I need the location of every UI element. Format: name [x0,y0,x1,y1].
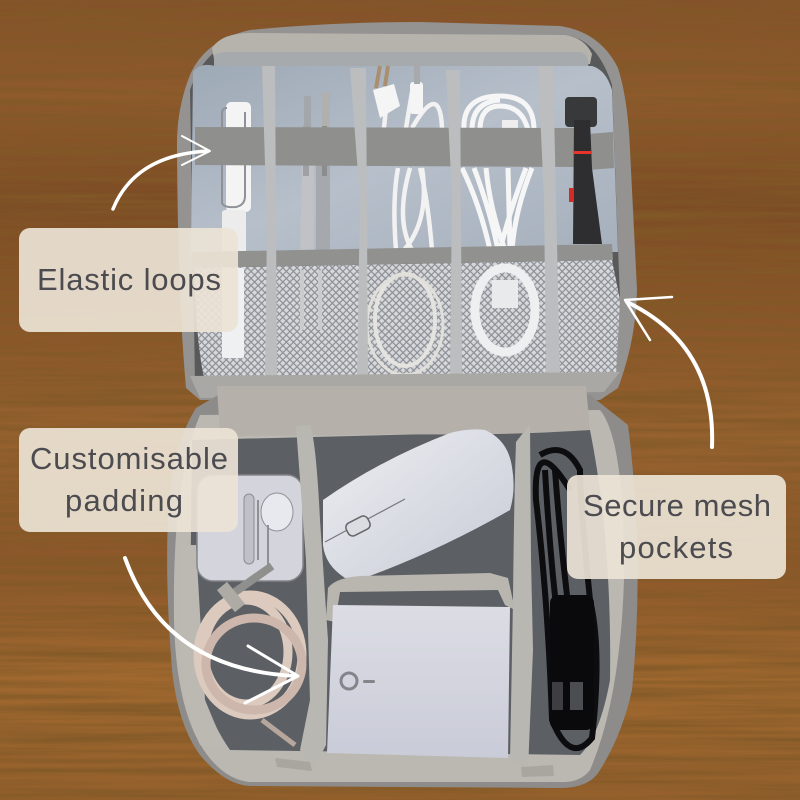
small divider above power bank [326,573,515,622]
arrow to mesh pockets [625,297,712,447]
black torch [565,97,597,127]
lower compartment shell [167,395,638,788]
arrow to elastic loops [113,136,210,209]
callout: elastic loops [19,228,238,332]
upper lid of bag [177,22,637,400]
callout: secure mesh pockets: Secure mesh [583,488,771,523]
callout: elastic loops: Elastic loops [37,262,221,297]
open organiser bag [167,22,638,788]
torch lower body [569,120,602,244]
callout: secure mesh pockets [567,475,786,579]
divider tab bottom right [521,765,554,777]
left divider [296,425,328,770]
arrow to padding [125,558,298,703]
rose cable coil [198,566,302,745]
callout: secure mesh pockets: pockets [619,530,733,565]
earphone case [197,475,303,581]
flap of lower compartment [217,386,590,436]
divider tab bottom [275,758,312,771]
callout: customisable padding: Customisable [30,441,228,476]
vertical elastic strips [262,66,560,375]
white plug and cables [373,64,442,250]
black power cable [536,450,597,748]
callout: customisable padding [19,428,238,532]
white pen with clip [222,102,251,360]
coiled white cable [462,96,534,250]
power bank [327,605,510,758]
right divider [510,424,533,770]
callout: customisable padding: padding [65,483,183,518]
mesh pocket [192,244,620,378]
metal tools [300,92,330,250]
wireless mouse [323,429,514,578]
elastic band upper [195,127,614,170]
bottom binding of lid [190,372,620,398]
